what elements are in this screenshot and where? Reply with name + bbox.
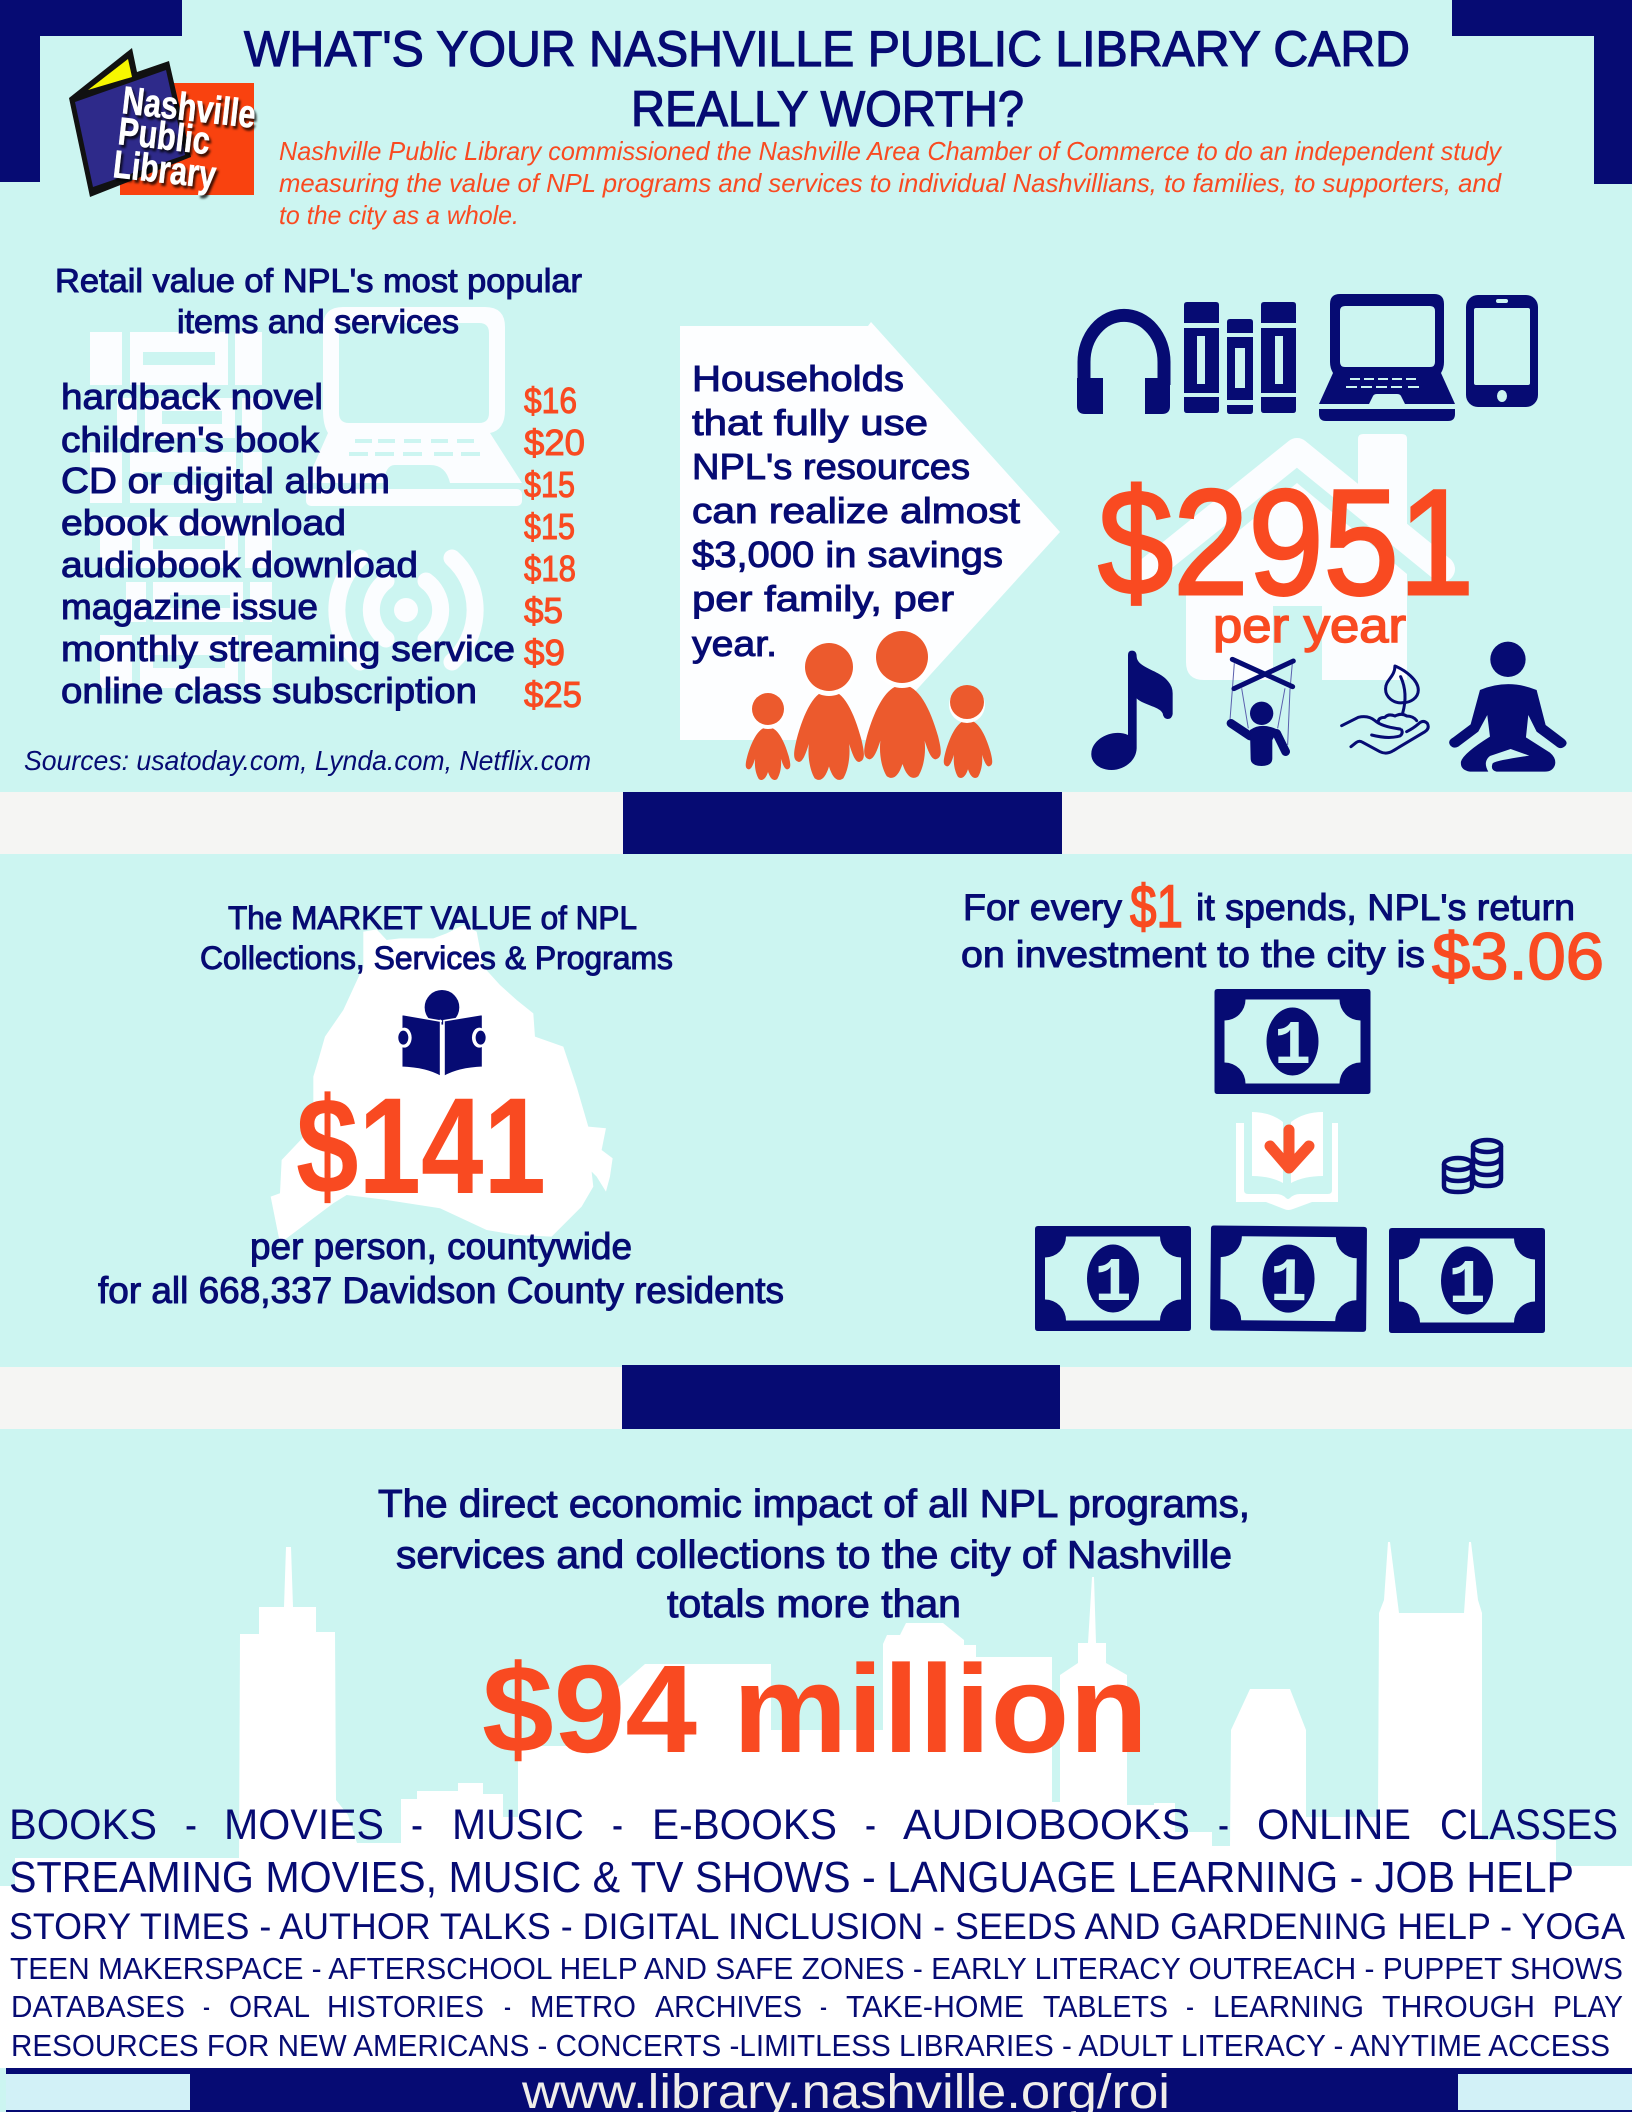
households text: that fully use xyxy=(692,402,928,443)
list of prices: $5 xyxy=(524,590,563,631)
sources note: Sources: usatoday.com, Lynda.com, Netflix.com xyxy=(24,745,591,776)
text: return on investment: $1 xyxy=(1130,873,1183,940)
text: return on investment: on investment to the city is xyxy=(961,934,1425,975)
households text: year. xyxy=(692,623,777,664)
services line 1: ONLINE xyxy=(1257,1801,1411,1849)
big number: $141: $141 xyxy=(296,1070,546,1223)
icon: dollar bill bottom left xyxy=(1035,1226,1191,1331)
services line 5: TABLETS xyxy=(1043,1989,1168,2024)
services line 5: ARCHIVES xyxy=(655,1989,802,2024)
ghost icons: book stacks xyxy=(90,332,272,688)
list of items: children's book xyxy=(61,419,320,460)
icon: person reading book xyxy=(397,990,487,1077)
skyline silhouette xyxy=(0,1542,1632,2112)
list of prices xyxy=(524,380,585,715)
icon: dollar bill bottom left: 1 xyxy=(1094,1248,1132,1319)
icon: headphones xyxy=(1077,315,1170,414)
intro paragraph xyxy=(279,136,1503,230)
households text: can realize almost xyxy=(692,490,1020,531)
ghost icon: laptop xyxy=(306,307,522,506)
households text: NPL's resources xyxy=(692,446,970,487)
services line 5: METRO xyxy=(530,1989,636,2024)
title: WHAT'S YOUR NASHVILLE PUBLIC LIBRARY CARD xyxy=(244,21,1410,77)
services line 5: HISTORIES xyxy=(327,1989,484,2024)
list of items: audiobook download xyxy=(61,544,418,585)
heading: direct economic impact: totals more than xyxy=(667,1583,961,1626)
logo: Nashville Public Library: Nashville xyxy=(120,79,258,137)
big number: $94 million: $94 million xyxy=(482,1640,1148,1779)
households text xyxy=(692,358,1020,664)
top left corner bracket xyxy=(0,0,182,182)
heading: market value: Collections, Services & Programs xyxy=(200,940,673,976)
list of prices: $9 xyxy=(524,632,565,673)
footer bar xyxy=(0,2068,1632,2112)
icon: row of books xyxy=(1184,302,1296,414)
icon: smartphone xyxy=(1466,295,1538,407)
label: per year: per year xyxy=(1213,600,1406,653)
list of items: ebook download xyxy=(61,502,346,543)
list of prices: $15 xyxy=(524,506,575,547)
heading: retail value xyxy=(55,262,582,340)
text: return on investment: For every xyxy=(963,887,1122,928)
intro paragraph: Nashville Public Library commissioned the Nashville Area Chamber of Commerce to do an independent study xyxy=(279,136,1503,166)
list of items xyxy=(61,376,515,711)
text: per person countywide: per person, countywide xyxy=(250,1226,632,1267)
heading: direct economic impact: The direct economic impact of all NPL programs, xyxy=(378,1483,1250,1526)
services line 2: STREAMING MOVIES, MUSIC & TV SHOWS - LANGUAGE LEARNING - JOB HELP xyxy=(9,1853,1574,1902)
icon: dollar bill bottom middle: 1 xyxy=(1270,1248,1307,1319)
divider band 1 xyxy=(0,792,1632,854)
list of prices: $25 xyxy=(524,674,582,715)
list of items: CD or digital album xyxy=(61,460,390,501)
services line 5: PLAY xyxy=(1553,1989,1623,2024)
heading: direct economic impact xyxy=(378,1483,1250,1626)
services line 1: MOVIES xyxy=(224,1801,384,1849)
list of items: online class subscription xyxy=(61,670,477,711)
services line 5: ORAL xyxy=(229,1989,310,2024)
households text: per family, per xyxy=(692,578,954,619)
services line 1: E-BOOKS xyxy=(652,1801,837,1849)
icon: coin stacks xyxy=(1444,1140,1501,1192)
list of items: hardback novel xyxy=(61,376,323,417)
top right corner bracket xyxy=(1452,0,1632,184)
services line 5: - xyxy=(504,1989,511,2024)
services line 1: - xyxy=(612,1801,623,1849)
services line 1: - xyxy=(1218,1801,1229,1849)
list of prices: $20 xyxy=(524,422,585,463)
intro paragraph: measuring the value of NPL programs and services to individual Nashvillians, to families, to supporters, and xyxy=(279,168,1503,198)
services line 5: TAKE-HOME xyxy=(846,1989,1024,2024)
list of items: monthly streaming service xyxy=(61,628,515,669)
text: return on investment xyxy=(961,873,1604,993)
services line 1 xyxy=(9,1801,1618,1849)
text: return on investment: $3.06 xyxy=(1432,919,1604,993)
list of prices: $15 xyxy=(524,464,575,505)
map: Davidson County xyxy=(271,925,613,1243)
text: per person countywide xyxy=(98,1226,784,1311)
text: per person countywide: for all 668,337 Davidson County residents xyxy=(98,1270,784,1311)
logo: Nashville Public Library: Public xyxy=(116,110,212,163)
text: return on investment: it spends, NPL's return xyxy=(1196,887,1575,928)
heading: retail value: items and services xyxy=(177,303,459,340)
heading: market value xyxy=(200,900,673,976)
icon: music note xyxy=(1091,651,1173,770)
icon: dollar bill bottom middle xyxy=(1210,1226,1367,1332)
services line 1: AUDIOBOOKS xyxy=(903,1801,1190,1849)
services line 5: THROUGH xyxy=(1382,1989,1535,2024)
icon: dollar bill bottom right: 1 xyxy=(1448,1250,1486,1321)
logo: Nashville Public Library: Library xyxy=(111,143,218,197)
icon: hand holding seedling xyxy=(1342,666,1428,753)
icon: marionette puppet xyxy=(1230,659,1293,766)
title: REALLY WORTH? xyxy=(631,81,1024,137)
logo: Nashville Public Library xyxy=(69,48,258,197)
icon: dollar bill top xyxy=(1214,989,1370,1094)
ghost icon: house xyxy=(1150,434,1442,680)
services line 5: - xyxy=(203,1989,210,2024)
services line 5: - xyxy=(1186,1989,1194,2024)
heading: direct economic impact: services and collections to the city of Nashville xyxy=(396,1534,1232,1577)
list of prices: $16 xyxy=(524,380,577,421)
services line 1: - xyxy=(185,1801,197,1849)
icon: family xyxy=(746,631,992,780)
icon: yoga figure xyxy=(1449,642,1567,772)
services line 5: - xyxy=(820,1989,827,2024)
list of prices: $18 xyxy=(524,548,576,589)
ghost icon: broadcast signal xyxy=(337,558,475,662)
services line 5: LEARNING xyxy=(1213,1989,1364,2024)
icon: laptop xyxy=(1319,294,1455,421)
white arrow panel xyxy=(680,322,1060,740)
intro paragraph: to the city as a whole. xyxy=(279,200,519,230)
list of items: magazine issue xyxy=(61,586,318,627)
services line 3: STORY TIMES - AUTHOR TALKS - DIGITAL INCLUSION - SEEDS AND GARDENING HELP - YOGA xyxy=(9,1906,1625,1947)
services line 5 xyxy=(11,1989,1623,2024)
heading: retail value: Retail value of NPL's most popular xyxy=(55,262,582,299)
services line 1: - xyxy=(865,1801,876,1849)
households text: $3,000 in savings xyxy=(692,534,1003,575)
services line 1: BOOKS xyxy=(9,1801,157,1849)
title xyxy=(244,21,1410,137)
divider band 2 xyxy=(0,1365,1632,1429)
icon: dollar bill top: 1 xyxy=(1274,1011,1311,1082)
heading: market value: The MARKET VALUE of NPL xyxy=(228,900,637,936)
services line 1: - xyxy=(411,1801,423,1849)
households text: Households xyxy=(692,358,904,399)
icon: open book with down arrow xyxy=(1236,1112,1338,1210)
services line 5: DATABASES xyxy=(11,1989,185,2024)
services line 1: MUSIC xyxy=(452,1801,584,1849)
big number: $2951: $2951 xyxy=(1098,458,1474,626)
icon: dollar bill bottom right xyxy=(1389,1228,1545,1333)
